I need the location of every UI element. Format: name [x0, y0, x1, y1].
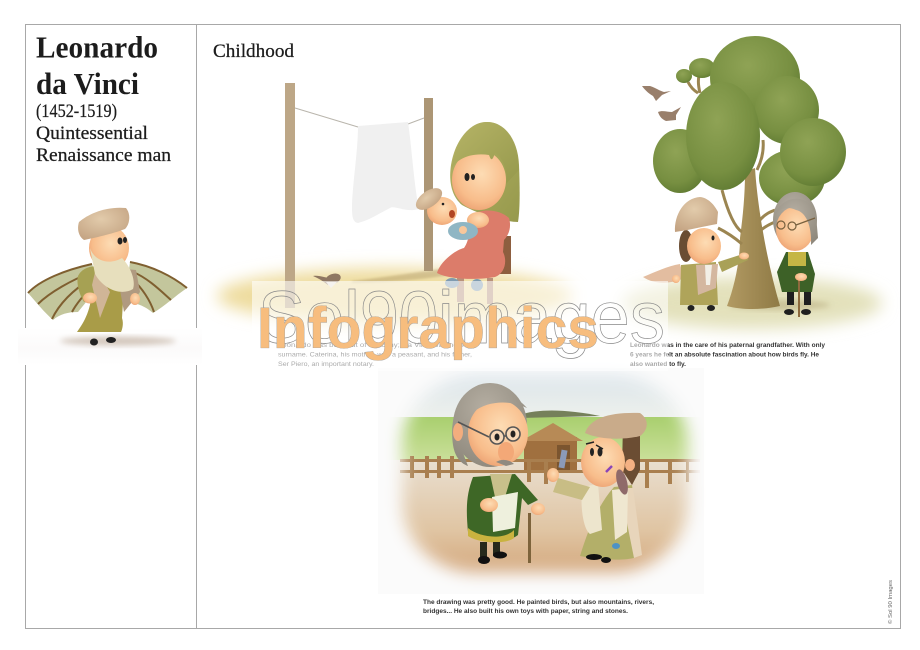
clothesline: [295, 108, 424, 127]
bird: [313, 272, 342, 288]
young Leonardo with pencils: [547, 413, 647, 563]
credit: © Sol 90 Images: [887, 580, 894, 624]
caption: drawing: [423, 599, 654, 615]
scene: showing the drawing to grandfather: [388, 371, 702, 586]
caption: grandfather: [630, 342, 825, 368]
baby: [412, 184, 478, 240]
subtitle line two: Renaissance man: [36, 145, 172, 166]
grandfather: [773, 192, 818, 317]
caption: birth: surname. Caterina, his mother, was a peasant, and his father,: [278, 352, 472, 358]
heading: Childhood: Childhood: [213, 41, 295, 62]
dates: (1452-1519): [36, 101, 117, 122]
scene: mother and baby at the clothesline: [217, 83, 573, 324]
scene: Leonardo and grandfather under the tree: [622, 36, 882, 329]
right post: [424, 98, 433, 271]
caption: grandfather: also wanted to fly.: [630, 361, 686, 368]
left post: [285, 83, 295, 308]
caption: drawing: The drawing was pretty good. He painted birds, but also mountains, rivers,: [423, 599, 654, 606]
subtitle line one: Quintessential: [36, 123, 148, 144]
sheet: [352, 122, 419, 223]
watermark: Infographics: Infographics: [257, 296, 599, 361]
caption: grandfather: Leonardo was in the care of his paternal grandfather. With only: [630, 342, 825, 349]
fence: [400, 456, 700, 488]
caption: birth: Leonardo was born out of Tuscany; Da Vinci was not his: [278, 342, 473, 349]
flying birds: [642, 86, 681, 121]
illustration: Leonardo with wings: [18, 208, 202, 365]
hut: [521, 423, 583, 470]
title block: [36, 30, 172, 166]
caption: birth: Ser Piero, an important notary.: [278, 361, 374, 368]
watermark: Sol 90 images: Sol90images: [258, 276, 665, 359]
mother: [437, 122, 520, 304]
watermark overlay: [252, 281, 668, 371]
caption: birth: [278, 342, 473, 368]
landscape background: [391, 371, 700, 584]
title: Leonardo: [36, 30, 158, 64]
tree: [653, 36, 846, 309]
title second line: da Vinci: [36, 66, 139, 101]
caption: drawing: bridges... He also built his own toys with paper, string and stones.: [423, 608, 628, 615]
young Leonardo: [643, 197, 749, 311]
sidebar divider: [196, 24, 198, 629]
caption: grandfather: 6 years he felt an absolute fascination about how birds fly. He: [630, 352, 819, 358]
grandfather with paper and cane: [452, 383, 545, 564]
